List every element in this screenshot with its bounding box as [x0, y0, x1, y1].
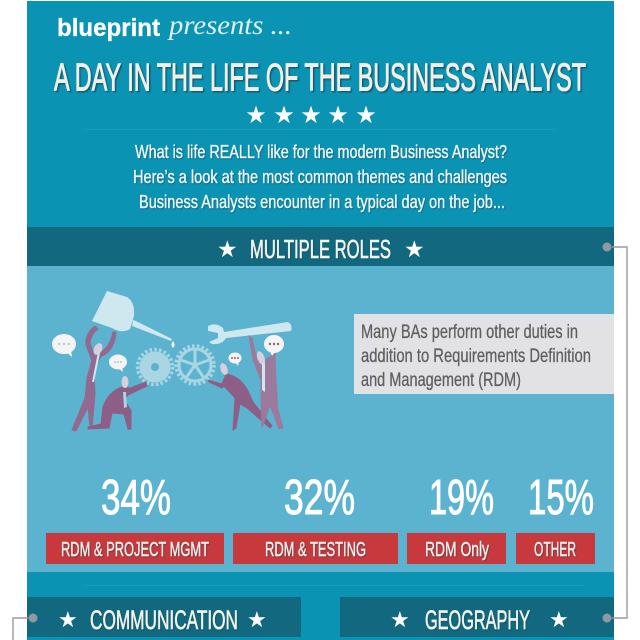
heading band: geography: ★: [390, 608, 410, 633]
statistic: 32% RDM and testing: RDM & TESTING: [265, 538, 366, 561]
heading band: multiple roles: ★: [217, 237, 238, 263]
statistic: 19% RDM only: 19%: [429, 471, 494, 525]
statistic: 19% RDM only: [407, 471, 506, 564]
statistic: 34% RDM and project management: 34%: [101, 471, 171, 525]
lower teal section: [27, 572, 614, 640]
intro text: What is life REALLY like for the modern Business Analyst?: [135, 141, 507, 162]
intro text: [133, 141, 507, 212]
logo: blueprint presents: [57, 10, 292, 42]
star rating: ★: [300, 101, 322, 129]
heading band: multiple roles: MULTIPLE ROLES: [250, 234, 391, 264]
star rating: ★: [273, 101, 295, 129]
figure: man holding wrench: [249, 336, 283, 429]
icon: wrench: [208, 322, 292, 344]
star rating: [245, 101, 377, 129]
icon: oil can: [92, 291, 174, 348]
statistic: 32% RDM and testing: 32%: [284, 471, 355, 525]
statistic: 32% RDM and testing: [233, 471, 398, 564]
statistic: 19% RDM only: RDM Only: [425, 538, 489, 561]
figure: kneeling man: [88, 376, 147, 429]
statistic: 15% other: OTHER: [534, 538, 576, 561]
statistic: 15% other: [516, 471, 595, 564]
icon: speech bubbles: [52, 334, 284, 372]
header panel: [27, 1, 614, 227]
heading band: multiple roles: [27, 227, 614, 266]
heading band: geography: GEOGRAPHY: [425, 605, 530, 635]
figure: pushing man: [208, 362, 272, 430]
callout: other duties: [354, 314, 614, 394]
statistic: 34% RDM and project management: [46, 471, 224, 564]
heading band: geography: [340, 597, 614, 637]
intro text: Here’s a look at the most common themes and challenges: [133, 166, 507, 187]
heading band: multiple roles: ★: [404, 237, 425, 263]
star rating: ★: [355, 101, 377, 129]
statistic: 34% RDM and project management: RDM & PROJECT MGMT: [61, 538, 209, 561]
heading band: geography: ★: [549, 608, 569, 633]
icon: left gear: [138, 350, 172, 384]
star rating: ★: [327, 101, 349, 129]
intro text: Business Analysts encounter in a typical day on the job...: [139, 191, 505, 212]
heading band: communication: ★: [58, 608, 78, 633]
icon: right gear: [176, 346, 214, 384]
statistic: 15% other: 15%: [528, 471, 594, 525]
panel: multiple roles: [27, 227, 614, 572]
logo: blueprint presents: presents ...: [167, 10, 292, 40]
connector: communication continuing down: [13, 618, 28, 640]
heading band: communication: [27, 597, 301, 637]
figure: man holding oil can: [72, 326, 116, 431]
logo: blueprint presents: blueprint: [57, 14, 161, 42]
heading band: communication: ★: [247, 608, 267, 633]
heading band: communication: COMMUNICATION: [90, 605, 238, 635]
callout: other duties: and Management (RDM): [361, 369, 521, 391]
star rating: ★: [245, 101, 267, 129]
connector: roles to geography: [612, 247, 627, 618]
illustration: business people fixing gears: [52, 291, 292, 431]
